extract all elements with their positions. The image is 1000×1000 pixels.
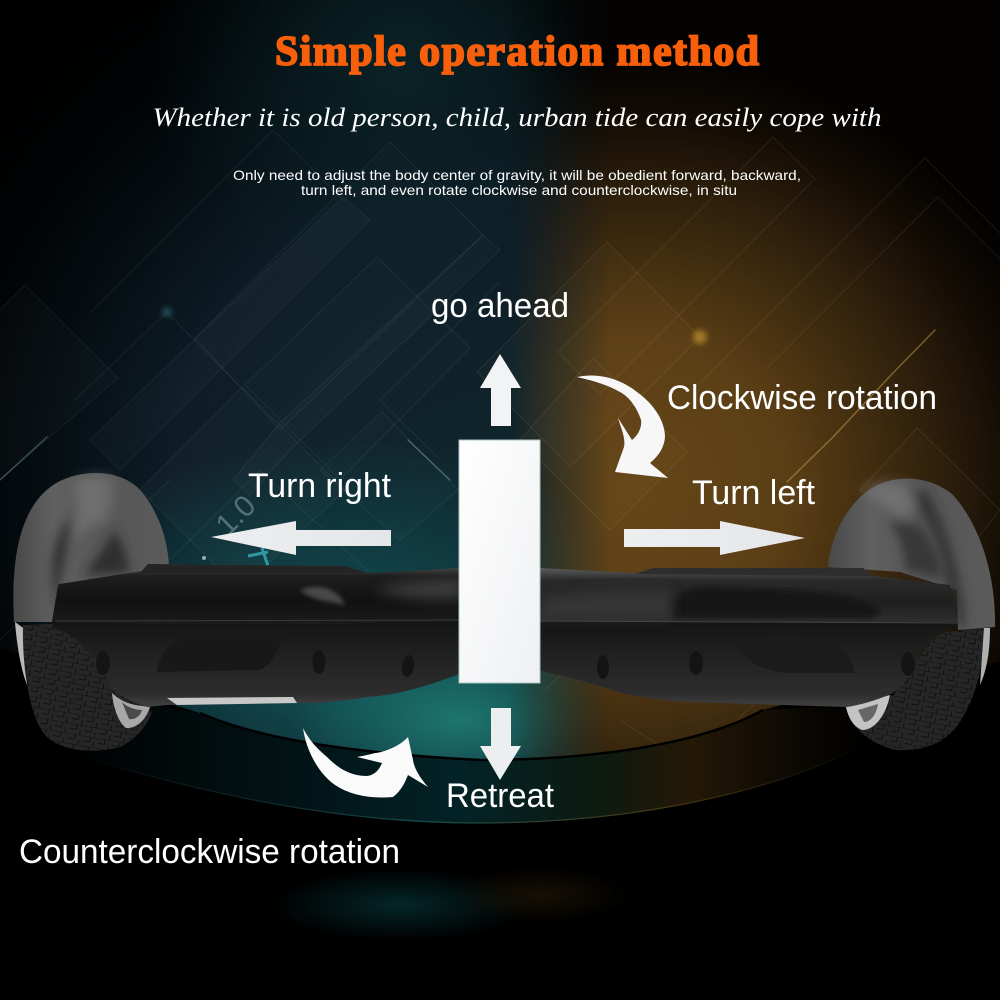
right fender — [828, 479, 995, 630]
label: turn left: Turn left — [692, 474, 816, 512]
arrow: turn right — [211, 521, 391, 555]
arrow: go ahead — [480, 354, 521, 426]
arrow: counterclockwise rotation — [303, 728, 428, 798]
label: counterclockwise rotation: Counterclockwise rotation — [19, 833, 400, 871]
left side panel and vents — [96, 635, 416, 678]
bright accent lines — [0, 330, 935, 760]
right side panel and vents — [597, 636, 915, 679]
description text — [233, 167, 801, 198]
label: turn right: Turn right — [248, 467, 392, 505]
left fender — [13, 473, 169, 622]
label: clockwise rotation: Clockwise rotation — [667, 379, 937, 417]
label: go ahead: go ahead — [431, 287, 569, 325]
description text: Only need to adjust the body center of gravity, it will be obedient forward, backward, — [233, 167, 801, 183]
label: retreat: Retreat — [446, 777, 555, 815]
left body shell — [52, 564, 462, 707]
light glows — [162, 307, 707, 344]
arrow: clockwise rotation — [577, 375, 668, 478]
faint version number: 1.0 — [210, 489, 262, 542]
description text: turn left, and even rotate clockwise and counterclockwise, in situ — [301, 182, 737, 198]
tagline: Whether it is old person, child, urban tide can easily cope with — [152, 103, 882, 132]
floor — [0, 645, 1000, 1000]
arrow: turn left — [624, 521, 805, 555]
right tire — [845, 628, 990, 750]
background — [0, 0, 1000, 759]
arrow: retreat — [480, 708, 521, 780]
diamond band pattern: cool side — [0, 130, 500, 700]
floor reflection — [270, 867, 630, 941]
faint version number — [202, 489, 268, 566]
right body shell — [538, 568, 960, 707]
left tire — [15, 622, 152, 751]
diamond band pattern: warm side — [477, 137, 1000, 765]
title: Simple operation method — [275, 29, 759, 75]
center white panel — [459, 440, 540, 683]
hoverboard — [13, 473, 995, 751]
